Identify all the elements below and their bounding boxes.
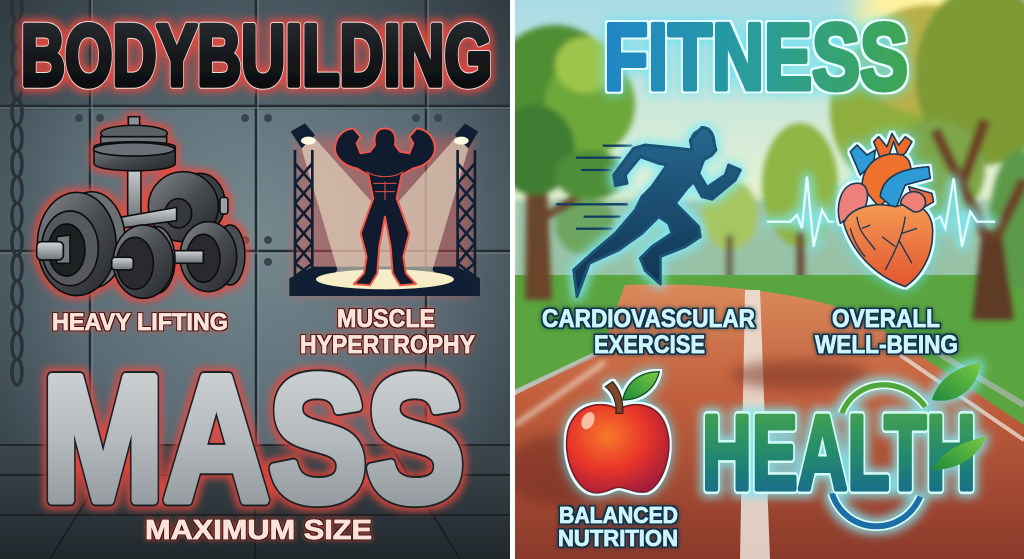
health swoosh xyxy=(832,363,980,526)
apple leaf xyxy=(623,372,659,400)
panel: bodybuilding xyxy=(0,0,510,559)
heading: bodybuilding: BODYBUILDING xyxy=(21,8,492,104)
stage base xyxy=(289,267,480,296)
panel: fitness xyxy=(493,0,1024,559)
icon: running figure xyxy=(557,146,631,229)
heading: mass xyxy=(37,360,472,518)
label: muscle hypertrophy: HYPERTROPHY xyxy=(300,331,475,359)
speed lines xyxy=(557,146,631,229)
label: cardiovascular exercise xyxy=(542,305,755,359)
left tree xyxy=(493,25,635,300)
label: overall well-being: WELL-BEING xyxy=(815,331,958,359)
back dumbbell xyxy=(120,172,228,242)
light beams xyxy=(300,138,470,278)
spotlights xyxy=(291,123,478,148)
runner silhouette xyxy=(574,127,740,297)
label: heavy lifting: HEAVY LIFTING xyxy=(52,309,228,336)
icon: dumbbells xyxy=(37,117,245,298)
label: overall well-being: OVERALL xyxy=(832,305,940,333)
apple body xyxy=(567,405,669,493)
logo: health xyxy=(702,363,986,526)
label: muscle hypertrophy xyxy=(300,305,475,359)
anatomical heart xyxy=(838,133,934,287)
muscle detail xyxy=(367,172,403,200)
icon: bodybuilder on stage xyxy=(289,123,480,297)
label: cardiovascular exercise: CARDIOVASCULAR xyxy=(542,305,755,333)
right tree xyxy=(830,0,1024,320)
sun xyxy=(840,0,952,46)
heading: mass: MASS xyxy=(42,339,464,538)
heading: mass: MASS xyxy=(42,339,464,538)
front large dumbbell xyxy=(37,192,125,296)
pulse lines xyxy=(767,177,995,247)
icon: heart with pulse xyxy=(767,133,995,287)
label: balanced nutrition: BALANCED xyxy=(559,502,678,528)
track xyxy=(515,284,1024,559)
park background xyxy=(493,0,1024,559)
heading: fitness: FITNESS xyxy=(604,4,908,109)
lattice towers xyxy=(295,150,475,278)
icon: hanging chain xyxy=(12,0,22,385)
stage glow xyxy=(290,137,473,297)
icon: apple xyxy=(567,372,669,493)
label: balanced nutrition xyxy=(558,502,678,551)
label: balanced nutrition: NUTRITION xyxy=(558,525,678,551)
label: cardiovascular exercise: EXERCISE xyxy=(594,331,705,359)
heading: bodybuilding: BODYBUILDING xyxy=(21,8,492,104)
health lower leaf xyxy=(932,436,986,470)
steel wall background xyxy=(0,0,510,559)
distant trees xyxy=(515,123,1024,285)
bodybuilder silhouette xyxy=(335,128,435,285)
front small dumbbell xyxy=(112,222,245,298)
heart veins xyxy=(850,217,917,270)
label: maximum size: MAXIMUM SIZE xyxy=(145,514,372,545)
upright dumbbell xyxy=(93,117,175,220)
label: overall well-being xyxy=(815,305,958,359)
label: muscle hypertrophy: MUSCLE xyxy=(337,305,435,333)
apple highlight xyxy=(579,410,597,431)
apple stem xyxy=(605,382,623,413)
grass xyxy=(515,275,1024,430)
